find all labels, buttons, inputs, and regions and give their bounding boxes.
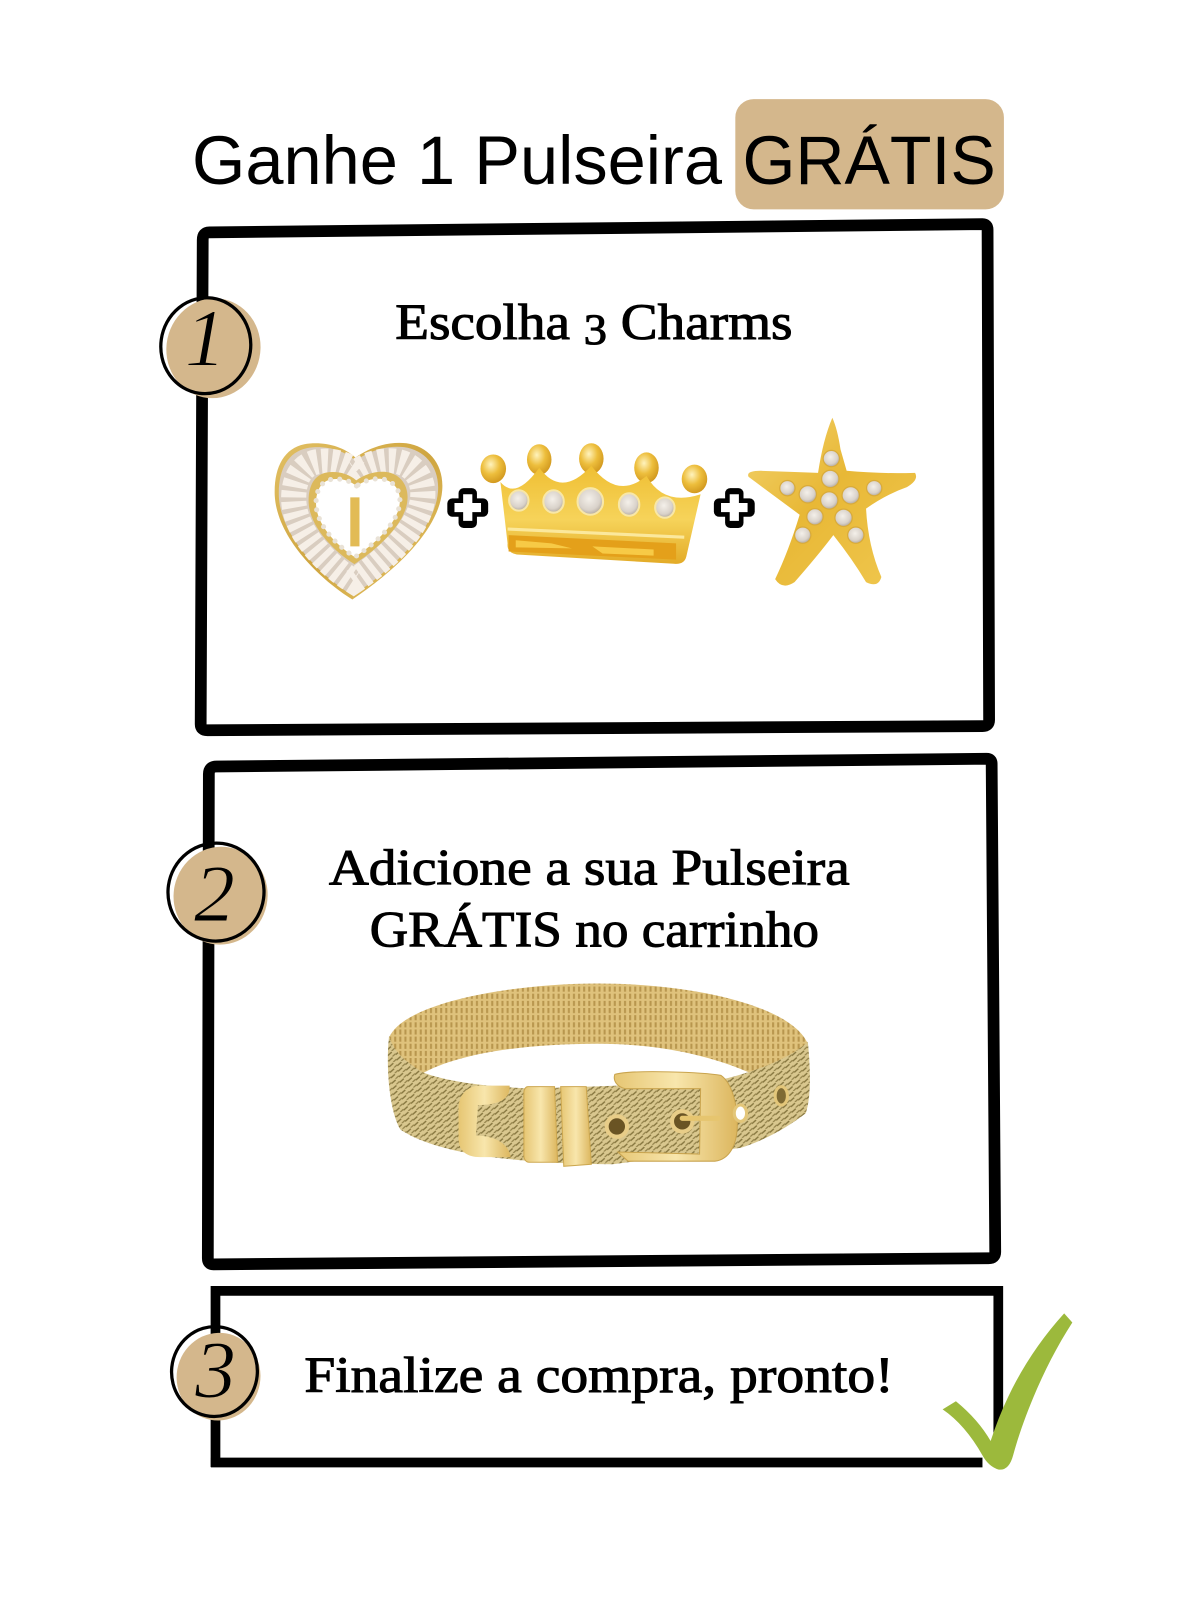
bracelet buckle pin: [672, 1111, 718, 1132]
bracelet eyelet near slides: [607, 1116, 627, 1137]
crown body: [500, 466, 701, 564]
badge: number 2: [162, 837, 277, 953]
heading: step 1: 3: [584, 307, 607, 354]
badge 1 numeral: 1: [185, 293, 226, 384]
star stones: [780, 450, 882, 543]
heart open centre: [323, 483, 393, 549]
star body: [748, 418, 916, 586]
badge 3 tan blob: [170, 1326, 267, 1427]
heart centre bar: [350, 497, 359, 546]
crown stones: [509, 488, 675, 518]
bracelet eyelet far right: [775, 1087, 787, 1105]
title text: Ganhe 1 Pulseira: Ganhe 1 Pulseira: [192, 122, 723, 199]
bracelet: [388, 983, 810, 1166]
bracelet buckle frame: [614, 1072, 737, 1161]
title highlight pill: [735, 99, 1004, 209]
panel: step 3 frame: [211, 1291, 998, 1467]
bracelet slide 2: [561, 1087, 591, 1166]
badge 3 ring: [167, 1322, 262, 1421]
icon: green check mark: [943, 1313, 1072, 1470]
badge 2 ring: [162, 837, 270, 947]
crown band line: [508, 529, 684, 537]
heart gold rim: [275, 443, 442, 599]
bracelet back band inner surface: [389, 983, 809, 1081]
heading: step 3: Finalize a compra, pronto!: [304, 1347, 894, 1404]
plus sign 1: [447, 488, 488, 528]
panel: step 2 frame: [208, 759, 995, 1264]
charm: heart: [275, 443, 442, 599]
title: [192, 99, 1004, 209]
badge 2 numeral: 2: [194, 848, 235, 939]
heart inner gold ring: [309, 472, 408, 564]
charm: crown: [481, 443, 707, 564]
badge: number 3: [167, 1322, 267, 1427]
crown slot: [509, 535, 676, 560]
heading line 1: Adicione a sua Pulseira: [329, 839, 850, 896]
heading: step 2: [329, 839, 850, 959]
heart baguette band: [279, 447, 438, 596]
bracelet slide 1: [524, 1087, 558, 1162]
bracelet front band mesh: [388, 1036, 810, 1164]
plus sign 2: [714, 488, 755, 528]
bracelet C clip: [459, 1086, 511, 1157]
badge 3 numeral: 3: [194, 1324, 236, 1415]
title text: GRÁTIS: GRÁTIS: [742, 122, 996, 199]
heading: step 1: Escolha: [395, 294, 557, 351]
charm: starfish: [748, 418, 916, 586]
badge: number 1: [155, 290, 270, 407]
badge 2 tan blob: [164, 838, 277, 953]
badge 1 ring: [155, 292, 257, 399]
heading: step 1: Charms: [607, 294, 793, 351]
crown balls: [481, 443, 707, 493]
heading line 2: GRÁTIS no carrinho: [370, 902, 819, 959]
badge 1 tan blob: [157, 290, 270, 407]
heart small stones: [316, 479, 400, 557]
bracelet eyelet right: [734, 1105, 747, 1121]
panel: step 1 frame: [201, 224, 989, 730]
